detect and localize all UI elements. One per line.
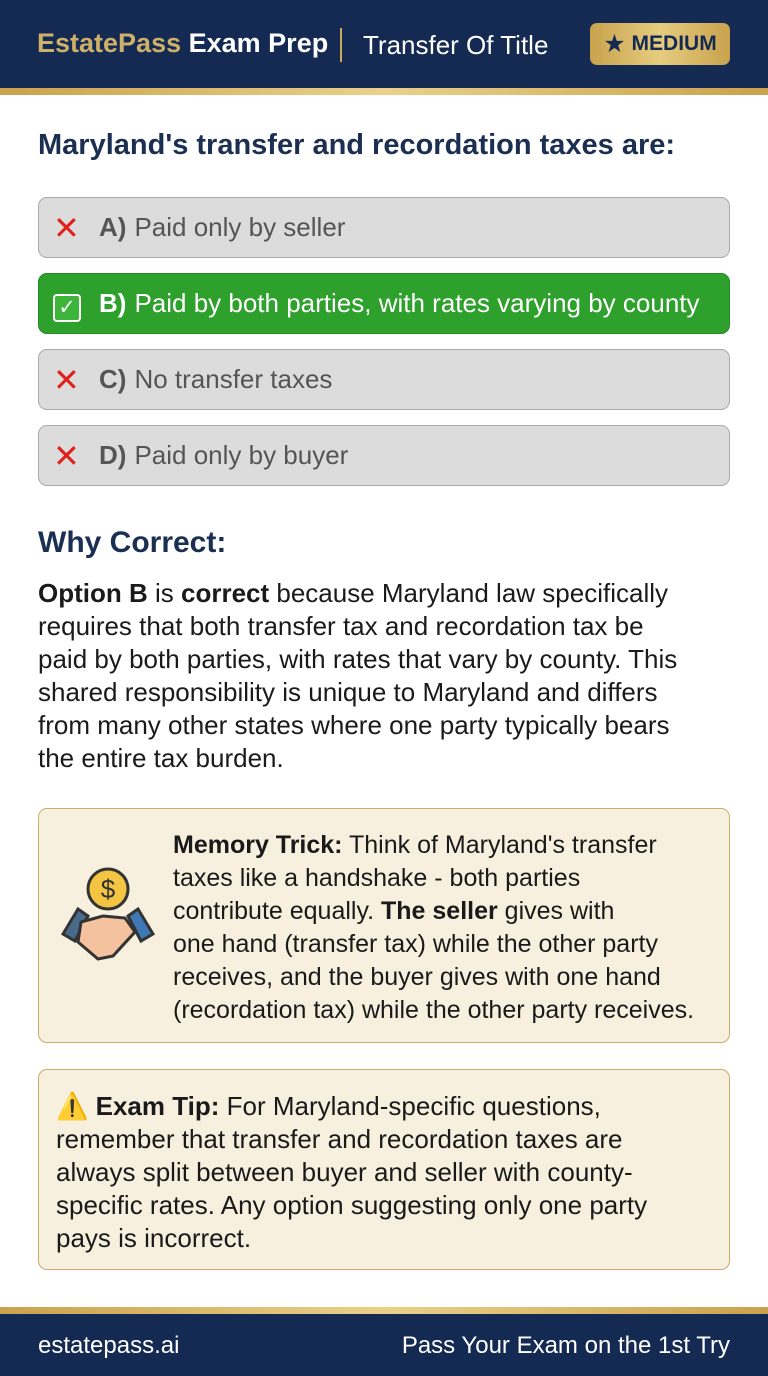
exam tip panel [38,1069,730,1270]
memory trick text: taxes like a handshake - both parties [173,864,580,892]
explanation: the entire tax burden. [38,743,284,773]
divider [340,28,342,62]
memory trick panel [38,808,730,1043]
brand title: EstatePass Exam Prep [37,28,328,58]
memory trick text: Memory Trick: Think of Maryland's transfer [173,831,657,859]
exam tip text: ⚠️ Exam Tip: For Maryland-specific questions, [56,1091,601,1121]
exam tip text [56,1091,647,1253]
header bar [0,0,768,88]
exam tip text: pays is incorrect. [56,1223,251,1253]
exam tip text: specific rates. Any option suggesting only one party [56,1190,647,1220]
memory trick text: contribute equally. The seller gives with [173,897,614,925]
explanation [38,578,677,773]
memory trick text: (recordation tax) while the other party receives. [173,996,694,1024]
difficulty badge: MEDIUM [632,32,717,55]
question heading: Maryland's transfer and recordation taxes are: [38,129,675,161]
difficulty badge: ★ [603,30,626,58]
option B correct: Paid by both parties, with rates varying by county [134,288,700,318]
option D [38,425,730,486]
exam tip text: remember that transfer and recordation taxes are [56,1124,623,1154]
option D: ✕ [53,438,80,474]
difficulty badge [590,23,730,65]
memory trick text: receives, and the buyer gives with one hand [173,963,661,991]
option B correct: ✓ [58,296,76,319]
option C: ✕ [53,362,80,398]
option A [38,197,730,258]
footer url: estatepass.ai [38,1332,179,1359]
option D: D) [99,440,126,470]
icon: handshake with coin [61,868,155,961]
exam tip text: always split between buyer and seller with county- [56,1157,633,1187]
explanation: Option B is correct because Maryland law specifically [38,578,668,608]
option B correct [38,273,730,334]
memory trick text: one hand (transfer tax) while the other party [173,930,658,958]
option D: Paid only by buyer [134,440,348,470]
footer bar [0,1314,768,1376]
why correct heading: Why Correct: [38,526,226,559]
option A: Paid only by seller [134,212,345,242]
icon: handshake with coin: $ [101,874,116,904]
explanation: requires that both transfer tax and recordation tax be [38,611,644,641]
explanation: from many other states where one party typically bears [38,710,670,740]
memory trick text [173,831,694,1024]
option C [38,349,730,410]
explanation: paid by both parties, with rates that vary by county. This [38,644,677,674]
option C: No transfer taxes [134,364,332,394]
topic: Transfer Of Title [363,30,548,60]
option A: A) [99,212,126,242]
explanation: shared responsibility is unique to Maryland and differs [38,677,658,707]
option B correct: B) [99,288,126,318]
footer slogan: Pass Your Exam on the 1st Try [402,1332,730,1359]
option A: ✕ [53,210,80,246]
option C: C) [99,364,126,394]
